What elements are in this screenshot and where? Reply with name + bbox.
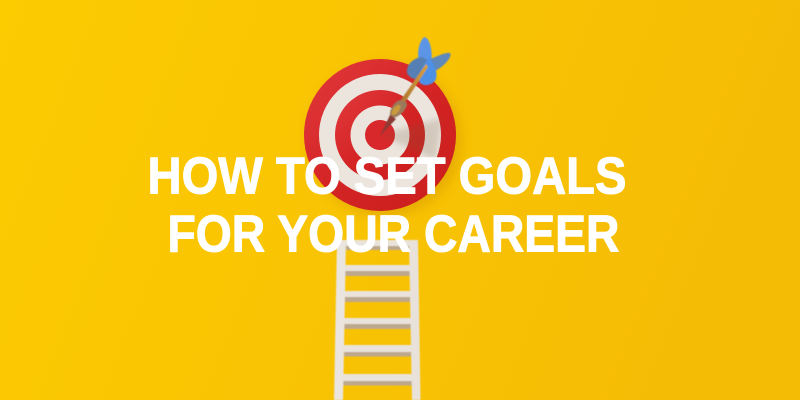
dart shaft	[398, 64, 428, 107]
dart flights	[407, 37, 451, 85]
icon: dart	[380, 37, 451, 136]
icon: target board	[304, 59, 461, 216]
icon: ladder	[334, 240, 420, 400]
dart barrel	[390, 100, 407, 118]
title line 1: HOW TO SET GOALS	[148, 148, 626, 206]
ladder rung shadows	[343, 246, 412, 386]
title line 2: FOR YOUR CAREER	[168, 206, 620, 264]
ladder rails	[334, 240, 346, 400]
dart tip	[380, 115, 396, 136]
title	[148, 148, 626, 264]
ladder rungs	[343, 240, 412, 381]
